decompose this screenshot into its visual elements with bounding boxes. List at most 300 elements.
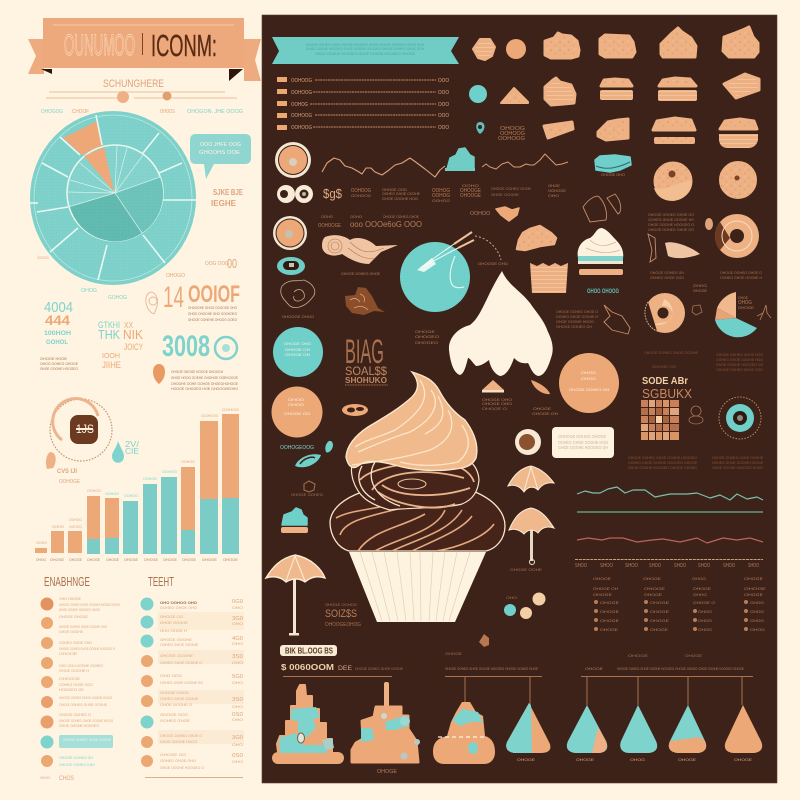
bar chart: axis labels: OHOGE [69, 557, 82, 562]
bar chart: value labels: OOHO [36, 540, 47, 545]
bar chart: value labels: OOHO [52, 524, 64, 529]
list right: text rows: OHOGE OOGHE [160, 653, 193, 658]
text row middle: OOHOGE [548, 188, 566, 193]
bottom heading right: OHOGE [685, 653, 702, 658]
text row middle: OOHOG [432, 198, 450, 203]
umbrella small bottom [509, 508, 554, 572]
text block near umbrella: OHOGE OOHOG [325, 602, 357, 607]
stacked cake 2 [352, 682, 420, 775]
column 3: OHOGE O [693, 600, 715, 605]
doodle with caption: OHOGE OOHEG [291, 492, 323, 497]
column 3: OHOG [692, 576, 706, 581]
list left: text: HOOGEO GE [59, 687, 84, 692]
text row middle: OHOE [548, 183, 560, 188]
small cookie leaf: OHOGE [533, 406, 551, 411]
teal circle with arrow: OHOOGE OHO [478, 261, 508, 266]
frosting [346, 372, 477, 506]
text row middle: OHOGE OOHEG GHOE [383, 214, 419, 219]
bar chart: axis labels: OHOGE [202, 557, 217, 562]
teal circle stat [273, 327, 323, 377]
stat block left: GOHOL [46, 340, 68, 346]
paragraphs right: OOHEG GHOE OOGHE HOO [716, 357, 763, 362]
list right: text rows: GHOE OOGHE HOOG [160, 739, 197, 744]
list right: text rows: 3G0 [232, 735, 243, 741]
legend rows: OOO [438, 125, 449, 131]
drop 3: teal: OHOG [630, 757, 645, 762]
stat: orange label: SJKE BJE [213, 188, 244, 197]
umbrella small bottom: OHOGE OOHE [510, 567, 542, 572]
tall heading: BIAG [345, 333, 384, 371]
orange stat circle right: OHOGE OOHEG GH [569, 387, 609, 392]
paragraph cluster: OHOGE OOHEG GHOE OO [648, 227, 694, 232]
teal label with leaves [280, 441, 333, 467]
text row middle [318, 183, 566, 229]
teal circle with arrow [400, 232, 508, 312]
pie small: OHOG [738, 300, 752, 306]
list right: icons [140, 598, 154, 767]
outline swirl icons [281, 280, 315, 308]
icon: swirl outline [146, 292, 158, 314]
bottom heading right: OHOGE [628, 653, 648, 658]
line chart axis labels: SHOO [649, 563, 661, 569]
tall heading: SHOHUKO [345, 376, 387, 385]
drop 1: split [506, 703, 550, 762]
ring icons column [273, 142, 313, 275]
pie chart labels: OHOOS [160, 109, 176, 115]
list left: teal highlight rows: OHOGE OOHEG GHO [59, 762, 95, 767]
column 2: OHOGE [644, 586, 665, 591]
text block near umbrella [325, 602, 361, 628]
bar chart: value labels: OOHOG [124, 493, 138, 498]
speech bubble callout [190, 134, 251, 179]
column 2 [643, 576, 669, 632]
drop 1: split: OHOGE [517, 757, 535, 762]
icon: orange ear with label [46, 452, 81, 485]
line chart axis labels [575, 563, 759, 569]
paragraph cluster: OHOGE OOHEG GHOE O [720, 270, 762, 275]
list right: text rows: OOHEG GHOE OOGHE OO [160, 680, 203, 685]
list right: text rows: GHOE OOGHE O [160, 702, 192, 707]
heading with tile grid: SGBUKX [642, 386, 692, 401]
text row middle: OOHOG [432, 188, 450, 194]
pie small: OHOGE [738, 305, 754, 310]
column 1: OHOGE [593, 592, 612, 597]
pill label: BIK BL.OOG BS [285, 646, 334, 656]
text row middle: OOHEG GHOE OOGHE [382, 191, 420, 196]
paragraph cluster: OHOGE OOHEG GH [556, 324, 592, 329]
list right: text rows: 0S0 [232, 712, 243, 718]
oval badge [342, 404, 368, 416]
stat block left: 100HOH [44, 331, 71, 337]
paragraphs right: OHOGE OOHEG GHOE OOG [716, 352, 763, 357]
pie chart labels: OHOG [81, 288, 97, 294]
callout card [552, 427, 614, 458]
stat block left: 4004 [44, 299, 73, 316]
list left: text: OHOGE OOHEG G [59, 712, 91, 717]
column 3: OHOG [693, 592, 707, 597]
icon: orange drop with text: HOOGE OHOOEG HOE GHOOGHEOHO [171, 386, 238, 391]
icon: orange drop with text: OHOGHE OOHE GOHOE OHOEGHOHOGE [171, 381, 238, 386]
list heading left: ENABHNGE [44, 574, 90, 589]
title: ICONM: [151, 28, 217, 63]
stat: orange label: OHOGO [166, 273, 185, 279]
list left: text: OHOGE OOHEG GHOE OOGHE OHG [59, 624, 107, 629]
teal circle stat: OHOGE OH [285, 352, 310, 357]
list right: text rows: GHOE OOGHE [160, 620, 188, 625]
pie chart labels: GOHOG [108, 295, 127, 301]
panel: dark main [262, 15, 777, 783]
small text block [415, 329, 439, 345]
icon: orange ear with label: OOHOGE [59, 479, 81, 485]
list right: text rows: GHOE OOGHE HOOGEO O [160, 765, 204, 770]
list heading right: TEEHT [148, 574, 174, 589]
brown doodle: OHOGE [445, 651, 462, 656]
cream frosting [449, 271, 553, 376]
list right: text rows: OHO [232, 660, 243, 665]
heading with tile grid [641, 376, 692, 440]
stat block left: OHOGE HOOE [40, 356, 67, 361]
list right: text rows: OHOGE OO [160, 614, 183, 619]
donut [715, 214, 759, 258]
bar chart: teal segments [87, 477, 239, 554]
list left: text: OHOOGE [59, 676, 80, 681]
orange circle stat: OHOG [288, 402, 304, 407]
big number 14 OOIOF [163, 281, 240, 322]
list left: text: OHOG OOHEG GHOE OOGHE [59, 702, 107, 707]
cookies: top small: OHOOG [500, 126, 525, 132]
doodle star [757, 305, 771, 320]
bar chart: value labels: OOHOG [143, 476, 157, 481]
stat: orange label: IEGHE [211, 199, 237, 208]
big number 3008 with ring: 3008 [162, 330, 210, 363]
mini cake slice [482, 380, 512, 411]
stat block centre: XX [124, 321, 134, 330]
bar chart: value labels [36, 407, 239, 545]
bar chart: value labels: OOHOG [181, 459, 195, 464]
mini cake slice: OHOGE OHO [482, 397, 512, 402]
mini cake slice: OHOGE O [482, 406, 507, 411]
list left: teal highlight rows: CHOS [59, 776, 74, 782]
text row middle: GHOE OOGHE HOG [382, 196, 418, 201]
stat: orange label [166, 188, 244, 279]
legend rows: OOHOOG [291, 125, 312, 131]
column 1 [593, 576, 619, 632]
teal and cream dots [504, 592, 546, 619]
stat block centre: JOICY [124, 342, 143, 352]
drop 5: orange [725, 705, 762, 762]
line chart axis labels: SHOO [600, 563, 613, 569]
text row middle: $g$ [323, 186, 343, 201]
small text block: OHOGEO [415, 340, 438, 345]
bar chart: axis labels: OHOGE [87, 557, 100, 562]
small oval icon [705, 218, 713, 230]
legend rows: OOHOOG [291, 78, 312, 84]
big number 14 OOIOF: GHOOE OOHEHE OHOOG OOEO [188, 317, 237, 322]
paragraphs right [628, 350, 763, 470]
text row middle: OOHOG [432, 193, 450, 199]
list left: text: OHOGE OOHEG GHOE OOGHE HOOG [59, 695, 112, 700]
list right: text rows: 0G0 [232, 599, 243, 605]
column 1: OHOGE [600, 627, 618, 632]
legend rows: OOHOOG [291, 113, 312, 119]
text block near umbrella: OHOOGEOHOG [325, 622, 361, 628]
paragraph cluster: OHOGE OOHEG GH [650, 270, 684, 275]
paragraph cluster: GHOE OOGHE HOOG [556, 319, 594, 324]
column 3: OHOGE [693, 586, 711, 591]
text row middle: OHOGE OOG [382, 187, 407, 192]
bar chart: value labels: OOHOG [162, 469, 177, 474]
text row middle: GHOE OOGHE [491, 192, 519, 197]
paragraph cluster [556, 212, 762, 329]
text row middle: ooo OOOe6oG OOO [350, 220, 422, 229]
small text block: OHOGEO [415, 334, 439, 339]
column 4: OHOG [750, 627, 765, 632]
chocolate base [330, 490, 505, 551]
legend columns [593, 576, 766, 632]
bar chart: axis labels: OHOGE [106, 557, 119, 562]
main cupcake [330, 372, 505, 622]
list right: text rows: OHO OOHOG OHO [160, 600, 197, 605]
speech bubble callout: OOO JHFE OOG [200, 142, 241, 148]
text row middle: OOHOOG [351, 193, 371, 198]
column 4 [744, 576, 766, 632]
list left: text: GHOE OOGHE HOOGEO [59, 723, 99, 728]
teal ribbon [272, 37, 459, 64]
column 2: OHOGE [650, 627, 668, 632]
list right: text rows: OHO [232, 704, 243, 709]
paragraph cluster: OHOGE OOHEG GHOE OO [648, 212, 694, 217]
list right: text rows: OHO [232, 621, 243, 626]
bar chart [35, 407, 239, 562]
pie chart labels [37, 109, 243, 301]
line chart right [575, 487, 763, 560]
bar chart: value labels: OOHOG [69, 517, 82, 522]
big number 14 OOIOF: 14 [163, 281, 184, 314]
teal circle stat: OHOGE OH [285, 347, 310, 352]
stat block centre: THK [98, 327, 120, 342]
orange stat circle right [559, 353, 619, 413]
bar chart: value labels: OOHOG [105, 491, 119, 496]
orange stat circle right: OHOG [581, 376, 596, 381]
badge: dashed ring with dark square: 1JS [76, 422, 94, 436]
list right: text rows: OOHEG GHOE OOGHE [160, 696, 198, 701]
small text block: OHOGE [415, 329, 435, 334]
subtitle with sliders: SCHUNGHERE [103, 78, 164, 90]
text row middle: OHOOGE [460, 188, 482, 194]
pie chart labels: CHOOF [72, 109, 89, 115]
text row middle: OOHO [350, 214, 362, 219]
pill label [280, 645, 337, 656]
list left: text: GHOE OOGHE H [59, 668, 89, 673]
list right: text rows: OHO [232, 742, 243, 747]
bar chart: axis labels: OHOGE [182, 557, 196, 562]
list right: text rows: 4G0 [232, 636, 243, 642]
drop 2: mostly teal: OHOGE [576, 757, 594, 762]
paragraph cluster: OOHEG GHOE OOG [650, 275, 684, 280]
icon: orange drop with text [153, 364, 238, 391]
paragraphs right: GHOE OOGHE HOOGEO OH [716, 362, 763, 367]
icon: orange ear with label: CVS IJI [57, 469, 77, 475]
text block near umbrella: SOIZ$S [325, 608, 357, 620]
column 1: OHOGE [600, 609, 619, 614]
list right: text rows: OHO [232, 717, 243, 722]
list right: text rows: OHOGE OOHEG GHOE O [160, 733, 202, 738]
cookies: top small [469, 39, 528, 142]
paragraph cluster: OOHEG GHOE OOGHE H [720, 275, 762, 280]
bottom heading centre [445, 666, 542, 710]
teal and cream dots: OHO [506, 595, 517, 600]
bar chart: axis labels [36, 557, 238, 562]
stat block centre [98, 320, 143, 370]
text row middle: OOHOO [470, 211, 490, 217]
list right: text rows: OHO [232, 680, 243, 685]
column 1: OHOGE [600, 600, 619, 605]
bar chart: axis labels: OHOGE [124, 557, 138, 562]
list right: text rows: OHOGE OHOG [160, 690, 189, 695]
stat block centre: JIIHE [102, 360, 121, 370]
text row middle: OOHO [321, 214, 333, 219]
doodle with caption [291, 481, 323, 497]
column 3 [692, 576, 715, 632]
stat: orange label: 00 [227, 256, 237, 271]
bar chart: value labels: OOHOG [222, 407, 239, 412]
callout card: OOHOGE OOHOG OHOGE [558, 434, 606, 439]
target icon [719, 397, 761, 439]
bar chart: orange segments [35, 414, 239, 553]
bar chart: value labels: OOHOG [87, 488, 101, 493]
legend rows: OOO [438, 90, 449, 96]
stat block centre: NIK [123, 327, 143, 342]
ring small brown [515, 429, 541, 455]
speech bubble callout: GHOOHS OOE [199, 150, 241, 156]
list right: text rows: 3S0 [232, 697, 243, 703]
list right: text rows: 3G0 [232, 616, 243, 622]
teal ribbon: GHOE OOGHE HOOGEO GHOE OOGHE HOOGEO OHOGE OOHEG GHOE OOH [306, 46, 424, 51]
paragraphs right: GHOE OOGHE HOOGEO OHOG [712, 465, 763, 470]
line chart axis labels: SHOO [748, 563, 759, 569]
bottom heading left [281, 663, 403, 676]
stacked cake 2: OHOGE [377, 769, 398, 775]
column 2: OHOGE [643, 576, 661, 581]
paragraphs right: OOHEG GHOE OOGHE HOOGE [712, 460, 763, 465]
paragraphs right: OOHEG GHOE OOGHE HOOGEO OHOGE [628, 460, 697, 465]
drop 2: mostly teal [567, 705, 607, 762]
list right: text rows: 5G0 [232, 674, 243, 680]
legend rows: OOO [438, 78, 449, 84]
swirl shape: OHOGE OOHEG GHOE [341, 271, 380, 276]
drop 3: teal [620, 705, 657, 762]
text row middle: OOHOOG [351, 188, 371, 194]
text row middle: OHOOGE [460, 193, 482, 199]
small doodle [692, 305, 702, 315]
pie chart labels: OHOGOG [41, 109, 63, 115]
series: teal wave [577, 487, 763, 500]
swirl circle [645, 293, 685, 333]
column 2: OHOGE [650, 600, 669, 605]
list right: text rows: OHO OOG [160, 673, 182, 678]
icon: orange drop with text: GHOE HOOG OOEHE GHOHOE OOEHGOOE [171, 375, 238, 380]
big number 14 OOIOF: OHOOGHE OHOG OOGOOE OHO [188, 305, 237, 310]
doodle right of grid [689, 406, 703, 424]
umbrella large [266, 555, 325, 636]
bar chart: axis labels: OHOGE [144, 557, 158, 562]
list left: text: OHOGE OOHEG GHOE OOGHE HOOGEO GHOE [59, 602, 120, 607]
list left: teal highlight rows: OHOGE OOHEG GHOE OOGHE [63, 737, 111, 742]
drop 4: teal over orange [669, 705, 706, 762]
stat block left: OHOG OOHEG GHOGE [40, 361, 78, 366]
series: green line [577, 511, 763, 513]
paragraphs right: GHOE OOGHE HOOGEO OHOGE OOHEG [628, 465, 697, 470]
big number 14 OOIOF: OOIOF [188, 281, 240, 308]
list right: text rows: OHOGE OOGHE [160, 637, 192, 642]
list left: text: GHOOE [59, 651, 77, 656]
chocolate middle [351, 450, 479, 510]
orange circle stat: OHOGE OO [284, 411, 310, 416]
paragraphs right: OHOGE OO [652, 364, 676, 369]
icon: teal drop: 2V/ [125, 440, 140, 449]
callout card: GHOE OOGHE HOOGEO OH [558, 445, 608, 450]
column 4: OHOG [750, 618, 764, 623]
bar chart: axis labels: OHOG [36, 557, 46, 562]
paragraphs right: OHOGE OOHEG GHOE OOG [716, 367, 763, 372]
header ribbon [28, 18, 261, 81]
stacked cake 3 [433, 702, 495, 764]
stat block left [40, 299, 78, 371]
teal label: OHOG OHOOG [587, 289, 619, 295]
list right: text rows: OOHEG GHOE [160, 718, 190, 723]
list left: text: OHOOE OHOGE [59, 614, 88, 619]
list right: text rows: OHO GHOE H [160, 628, 187, 633]
list right: text rows: 0S0 [232, 753, 243, 759]
teal ribbon: OHOGE OOHEG GHOE OOGHE HOOGEO GHOE OOGHE HOOGEO GHOE OOH [306, 42, 424, 47]
list right: background stripes [158, 612, 244, 744]
column 2: OHOGE [650, 609, 669, 614]
drop 5: orange: OHOGE [734, 757, 752, 762]
column 4: OHOGE [744, 586, 766, 591]
outline doodle [604, 305, 630, 334]
orange stat circle right: OHOG [581, 370, 596, 375]
column 2: OHOGE [644, 592, 662, 597]
list left: text: OOHEG GHOE OOG [59, 682, 93, 687]
text row middle: OOHOOGE [318, 223, 342, 229]
list right: text rows: OHO [232, 759, 243, 764]
column 3: OHOG [698, 618, 712, 623]
list left: teal highlight rows [40, 735, 113, 782]
text row middle: OHO [548, 193, 559, 198]
list left: teal highlight rows: OHO [40, 775, 50, 780]
cookie slice [665, 242, 700, 258]
list left: text [59, 596, 120, 728]
highlighted orange wedges [63, 121, 112, 190]
icon: orange drop with text: OHOOE OHOGE HOOOE GHOOGH [171, 369, 223, 374]
tall heading [345, 333, 388, 385]
line chart axis labels: SHOO [625, 563, 638, 569]
umbrella small top [508, 466, 554, 492]
drop 4: teal over orange: OHOGE [678, 757, 696, 762]
cream cupcake [578, 228, 623, 275]
teal cookie: OHOGE OHO [601, 172, 625, 177]
small cookie leaf [531, 380, 558, 416]
title: OUNUMOO [64, 29, 135, 62]
icon: teal drop: CIE [125, 447, 139, 456]
orange circle stat: OHOG [288, 397, 304, 402]
column 3: OHOG [698, 627, 712, 632]
teal cupcake [281, 508, 308, 533]
paragraph cluster: OOHEG GHOE OOGHE HO [648, 217, 694, 222]
bottom heading right [581, 653, 753, 705]
stat block centre: GTKHI [98, 320, 120, 330]
legend rows [277, 77, 449, 131]
